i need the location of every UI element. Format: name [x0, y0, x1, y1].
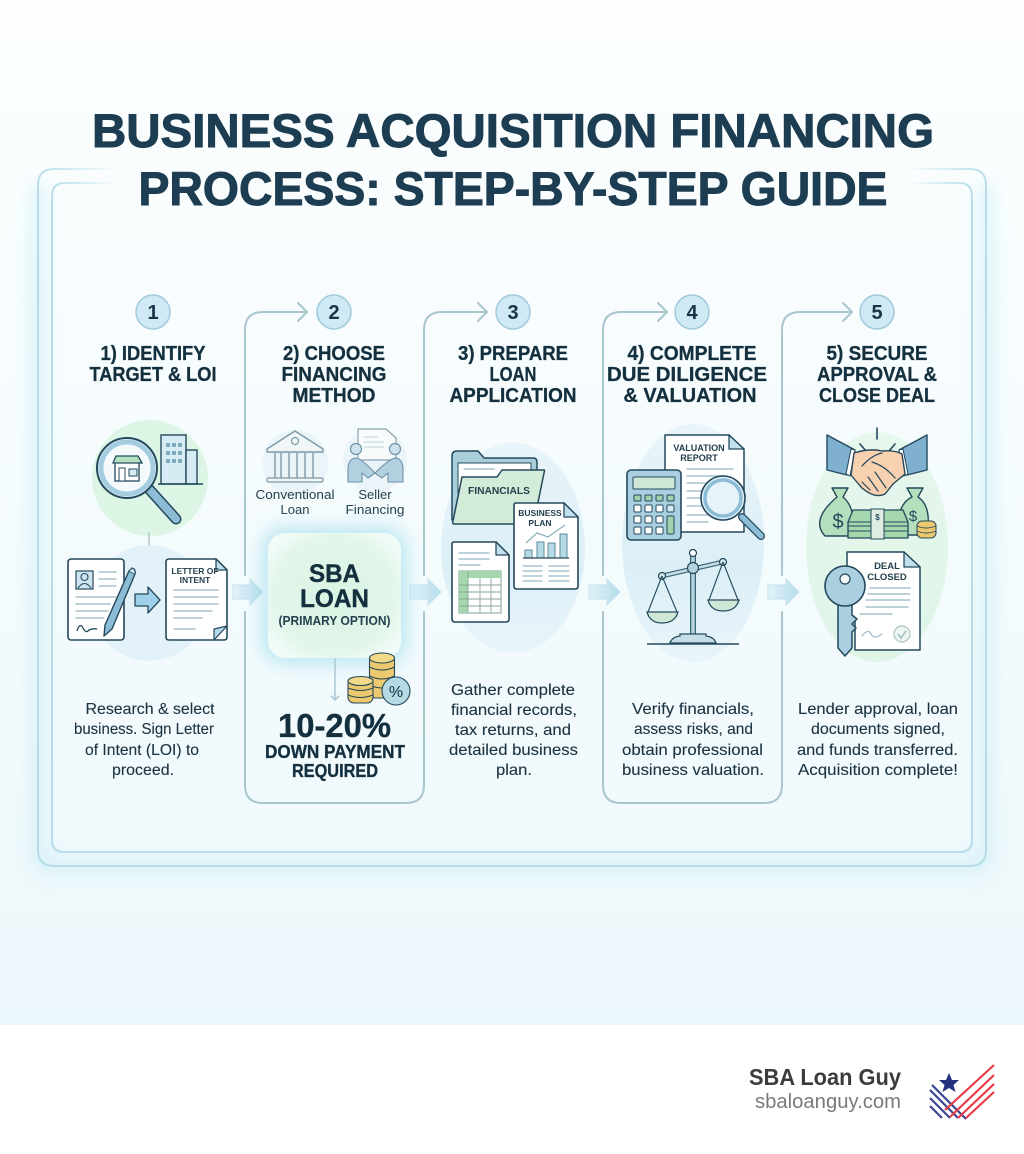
arrow: step 2 to 3 — [410, 579, 441, 605]
badge: step 1 — [136, 295, 170, 329]
icon group: signing letter of intent: LETTER OF — [171, 566, 219, 576]
text: step 5 description: Acquisition complete! — [798, 762, 958, 779]
footer band — [0, 1025, 1024, 1154]
callout: down payment: DOWN PAYMENT — [265, 742, 405, 762]
text: step 4 description: obtain professional — [622, 742, 763, 759]
text: conventional loan label: Conventional — [256, 487, 335, 502]
heading: step 2: METHOD — [292, 385, 376, 407]
heading: step 5 — [817, 343, 937, 407]
connector: step 2 to step 3 — [424, 303, 487, 575]
icon group: loan application documents: PLAN — [528, 518, 552, 528]
text: conventional loan label: Loan — [281, 502, 309, 517]
icon group: target search — [92, 420, 208, 536]
icon group: loan application documents: BUSINESS — [518, 508, 562, 518]
callout: down payment: 10-20% — [278, 707, 391, 744]
text: step 1 description: of Intent (LOI) to — [85, 742, 199, 759]
heading: step 3 — [450, 343, 576, 407]
title — [92, 104, 934, 215]
text: step 1 description — [74, 701, 215, 779]
panel: SBA loan primary option — [262, 527, 407, 664]
heading: step 1: TARGET & LOI — [90, 364, 216, 386]
badge: step 3 — [496, 295, 530, 329]
arrow: step 1 to 2 — [233, 579, 263, 605]
text: step 3 description: Gather complete — [451, 682, 575, 699]
logo: star and stripes check — [930, 1065, 994, 1119]
badge: step 3: 3 — [507, 302, 519, 324]
brand name and url — [749, 1064, 901, 1113]
text: step 1 description: Research & select — [86, 701, 215, 718]
arrow: search to letter — [145, 533, 153, 553]
heading: step 3: 3) PREPARE — [458, 343, 568, 365]
heading: step 5: 5) SECURE — [826, 343, 928, 365]
panel: SBA loan primary option: SBA — [309, 560, 360, 588]
text: step 4 description — [622, 701, 764, 779]
icon group: approval and closing — [806, 428, 948, 662]
heading: step 1: 1) IDENTIFY — [100, 343, 206, 365]
text: step 3 description: financial records, — [451, 702, 577, 719]
icon group: approval and closing: $ — [832, 511, 844, 533]
badge: step 4 — [675, 295, 709, 329]
text: step 1 description: proceed. — [112, 762, 174, 779]
heading: step 3: APPLICATION — [450, 385, 576, 407]
heading: step 2: FINANCING — [282, 364, 386, 386]
text: step 3 description: plan. — [496, 762, 532, 779]
text: step 3 description: detailed business — [449, 742, 578, 759]
heading: step 5: APPROVAL & — [817, 364, 937, 386]
icon group: due diligence and valuation: VALUATION — [673, 443, 725, 453]
brand name and url: sbaloanguy.com — [755, 1091, 901, 1113]
text: step 3 description — [449, 682, 578, 779]
text: step 5 description: Lender approval, loan — [798, 701, 958, 718]
heading: step 1 — [90, 343, 216, 386]
text: step 4 description: business valuation. — [622, 762, 764, 779]
connector: step 1 to step 2 — [245, 303, 424, 803]
heading: step 3: LOAN — [490, 364, 536, 386]
icon group: approval and closing: CLOSED — [867, 572, 907, 583]
text: conventional loan label — [256, 487, 335, 517]
connector: step 3 to step 4 — [603, 303, 782, 803]
callout: down payment: REQUIRED — [292, 761, 378, 781]
panel: SBA loan primary option: LOAN — [300, 585, 369, 613]
text: step 5 description — [797, 701, 958, 779]
text: step 5 description: documents signed, — [811, 721, 945, 738]
title: PROCESS: STEP-BY-STEP GUIDE — [138, 162, 888, 215]
icon: coins with percent — [348, 653, 410, 705]
text: seller financing label: Seller — [358, 487, 392, 502]
badge: step 4: 4 — [686, 302, 698, 324]
icon group: signing letter of intent: INTENT — [180, 575, 211, 585]
badge: step 1: 1 — [147, 302, 159, 324]
heading: step 2: 2) CHOOSE — [283, 343, 385, 365]
icon: conventional loan bank — [262, 430, 328, 496]
panel: process frame — [38, 169, 986, 866]
icon group: approval and closing: $ — [909, 508, 918, 525]
heading: step 4: & VALUATION — [624, 385, 756, 407]
text: step 5 description: and funds transferred. — [797, 742, 958, 759]
badge: step 5: 5 — [871, 302, 883, 324]
title: BUSINESS ACQUISITION FINANCING — [92, 104, 934, 157]
connector: step 4 to step 5 — [782, 303, 852, 575]
icon: seller financing handshake — [343, 428, 407, 492]
text: step 4 description: assess risks, and — [634, 721, 753, 738]
badge: step 5 — [860, 295, 894, 329]
arrow: step 4 to 5 — [768, 579, 799, 605]
heading: step 5: CLOSE DEAL — [819, 385, 935, 407]
panel: SBA loan primary option: (PRIMARY OPTION) — [278, 614, 390, 628]
icon group: loan application documents: FINANCIALS — [468, 485, 530, 497]
icon: coins with percent: % — [389, 684, 403, 701]
heading: step 4 — [607, 343, 767, 407]
brand name and url: SBA Loan Guy — [749, 1064, 901, 1090]
heading: step 2 — [282, 343, 386, 407]
icon group: approval and closing: DEAL — [874, 561, 900, 572]
icon group: approval and closing: $ — [875, 513, 880, 522]
badge: step 2 — [317, 295, 351, 329]
text: step 1 description: business. Sign Letter — [74, 721, 215, 738]
heading: step 4: 4) COMPLETE — [628, 343, 756, 365]
icon group: due diligence and valuation — [622, 424, 764, 662]
text: seller financing label — [346, 487, 404, 517]
heading: step 4: DUE DILIGENCE — [607, 364, 767, 386]
icon group: due diligence and valuation: REPORT — [680, 453, 718, 463]
arrow: step 3 to 4 — [589, 579, 620, 605]
icon group: signing letter of intent — [68, 545, 227, 661]
icon group: loan application documents — [441, 443, 585, 653]
text: seller financing label: Financing — [346, 502, 404, 517]
text: step 4 description: Verify financials, — [632, 701, 754, 718]
callout: down payment — [265, 707, 405, 781]
badge: step 2: 2 — [328, 302, 340, 324]
arrow: SBA to down payment — [331, 659, 339, 700]
text: step 3 description: tax returns, and — [455, 722, 571, 739]
